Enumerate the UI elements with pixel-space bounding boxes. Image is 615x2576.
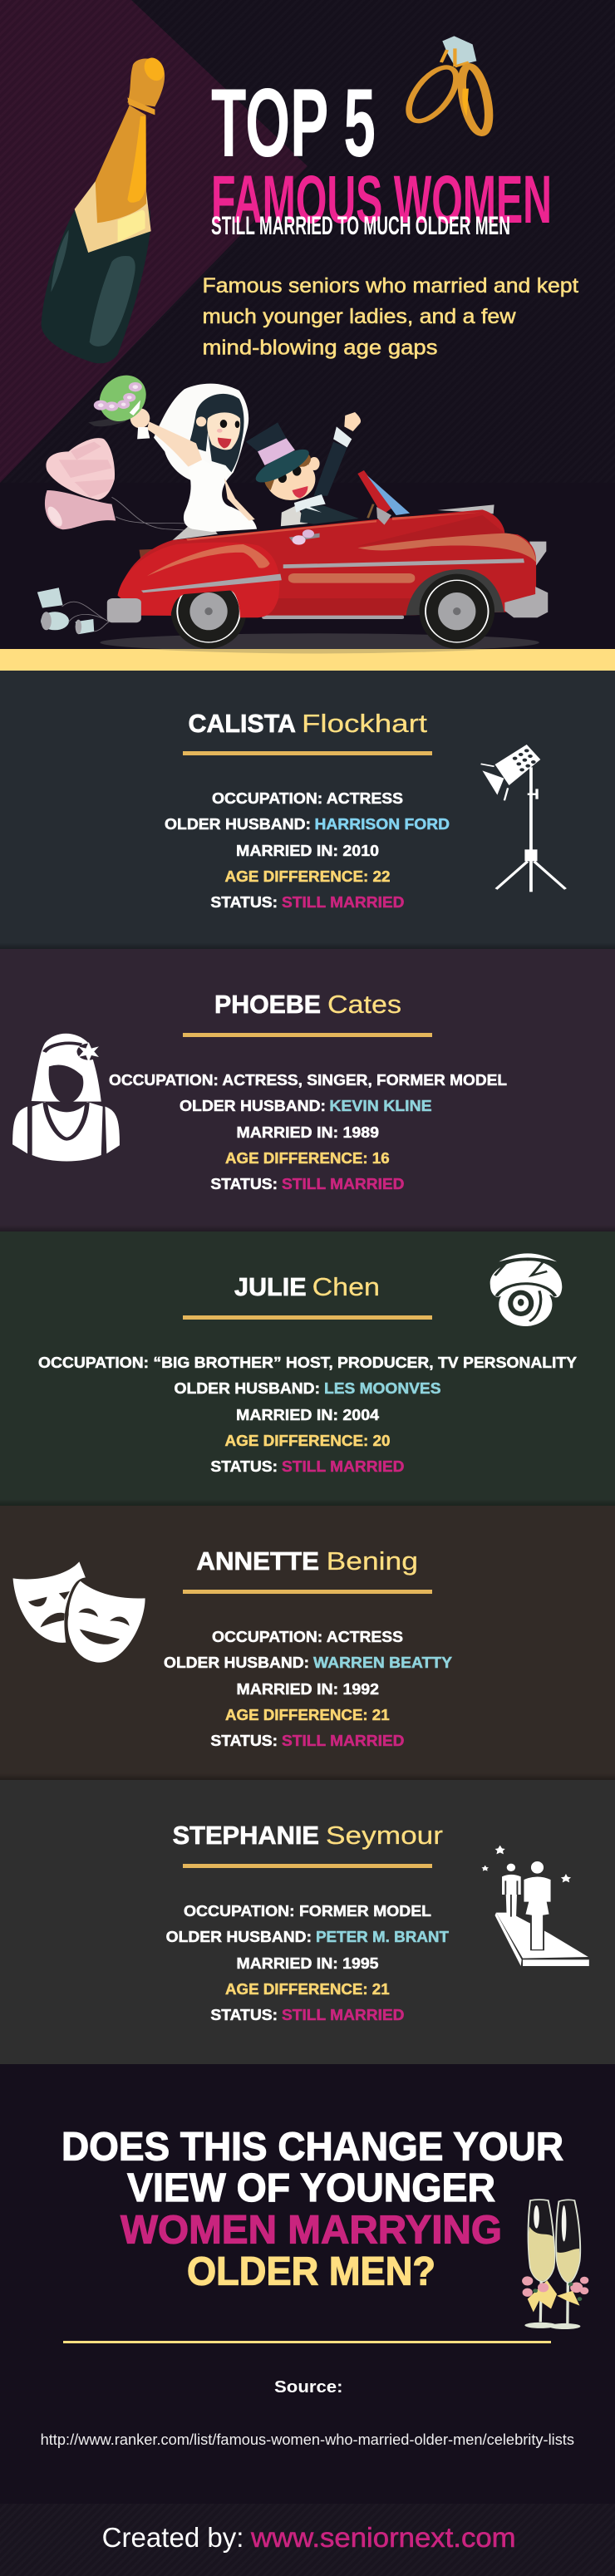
groom [246, 412, 361, 526]
icon: dome camera [490, 1253, 562, 1326]
details: OLDER HUSBAND: [175, 1379, 320, 1397]
details [166, 1902, 449, 2023]
heading: ANNETTE [196, 1546, 319, 1576]
credit line: Created by: [102, 2522, 244, 2553]
car shadow [100, 633, 539, 651]
panel: Calista Flockhart [0, 671, 615, 949]
details: HARRISON FORD [314, 815, 450, 833]
heading rule [183, 1590, 432, 1594]
magenta diagonal shape [0, 0, 308, 483]
details: LES MOONVES [324, 1379, 440, 1397]
wheel: rear [419, 574, 494, 649]
icon: champagne glasses [522, 2200, 588, 2329]
heading rule [183, 751, 432, 755]
panel: Phoebe Cates [0, 949, 615, 1231]
closing question [61, 2124, 563, 2293]
details: MARRIED IN: 1992 [236, 1680, 379, 1698]
icon: theatre masks [13, 1561, 145, 1663]
intro text: mind-blowing age gaps [203, 336, 437, 359]
details: PETER M. BRANT [316, 1928, 449, 1945]
details: OCCUPATION: ACTRESS [212, 789, 403, 807]
closing question: WOMEN MARRYING [121, 2207, 502, 2252]
heart balloons [45, 438, 189, 530]
icon: couple on catwalk [481, 1846, 589, 1966]
tin cans [37, 587, 109, 634]
details: OLDER HUSBAND: [166, 1928, 312, 1945]
details: KEVIN KLINE [329, 1097, 432, 1114]
credit line: www.seniornext.com [250, 2522, 516, 2553]
panel background [0, 1780, 615, 2064]
bride [130, 384, 257, 540]
panel: Julie Chen [0, 1231, 615, 1506]
wheel: front [171, 574, 246, 649]
icon: wedding rings [399, 36, 494, 135]
details: STATUS: [210, 893, 278, 911]
details: MARRIED IN: 2010 [236, 842, 379, 859]
details: OLDER HUSBAND: [165, 815, 311, 833]
heading [196, 1546, 418, 1576]
heading: CALISTA [188, 709, 296, 738]
title: TOP 5 [211, 68, 376, 177]
details: MARRIED IN: 1989 [236, 1123, 379, 1141]
panel background [0, 949, 615, 1231]
title [211, 68, 552, 240]
bouquet [88, 372, 152, 426]
details: OCCUPATION: “BIG BROTHER” HOST, PRODUCER, TV PERSONALITY [38, 1354, 577, 1371]
details: STATUS: [210, 2006, 278, 2023]
details: STILL MARRIED [282, 2006, 404, 2023]
details: STILL MARRIED [282, 1458, 404, 1475]
details: STILL MARRIED [282, 893, 404, 911]
details [165, 789, 450, 911]
heading rule [183, 1315, 432, 1320]
source label: Source: [274, 2378, 342, 2397]
heading [173, 1821, 443, 1850]
footer band [0, 2504, 615, 2576]
yellow band [0, 649, 615, 671]
heading: PHOEBE [214, 990, 321, 1019]
intro text: Famous seniors who married and kept [203, 274, 578, 297]
panel: Stephanie Seymour [0, 1780, 615, 2064]
heading [188, 709, 427, 738]
details: AGE DIFFERENCE: 21 [225, 1706, 390, 1723]
details: OLDER HUSBAND: [164, 1654, 309, 1671]
panel: Annette Bening [0, 1506, 615, 1780]
heading: Seymour [326, 1821, 443, 1850]
heading: Cates [327, 990, 401, 1019]
closing background [0, 2064, 615, 2504]
details: AGE DIFFERENCE: 20 [224, 1432, 391, 1449]
divider [63, 2341, 551, 2343]
front fender and trim [107, 507, 548, 622]
shadow on band [141, 649, 499, 653]
credit line [102, 2522, 516, 2553]
details: OLDER HUSBAND: [180, 1097, 326, 1114]
details: MARRIED IN: 1995 [236, 1954, 379, 1972]
details: MARRIED IN: 2004 [236, 1406, 380, 1423]
panel background [0, 671, 615, 949]
hero background [0, 0, 615, 649]
heading: STEPHANIE [173, 1821, 319, 1850]
panel background [0, 1506, 615, 1780]
details: STILL MARRIED [282, 1732, 404, 1749]
heading: JULIE [234, 1272, 307, 1301]
details: AGE DIFFERENCE: 22 [224, 868, 391, 885]
details: WARREN BEATTY [313, 1654, 452, 1671]
car [118, 470, 546, 619]
intro text: much younger ladies, and a few [203, 305, 517, 328]
source url: http://www.ranker.com/list/famous-women-who-married-older-men/celebrity-lists [41, 2431, 574, 2448]
details: AGE DIFFERENCE: 21 [225, 1980, 390, 1998]
closing panel [0, 2064, 615, 2504]
details: STATUS: [210, 1458, 278, 1475]
striped backdrop [0, 0, 615, 483]
details [38, 1354, 577, 1475]
details: STILL MARRIED [282, 1175, 404, 1192]
panel background [0, 1231, 615, 1506]
heading [234, 1272, 380, 1301]
icon: stage spotlight [481, 745, 565, 892]
heading: Chen [312, 1272, 380, 1301]
details: OCCUPATION: ACTRESS, SINGER, FORMER MODEL [109, 1071, 507, 1089]
heading: Flockhart [302, 709, 427, 738]
heading: Bening [327, 1546, 418, 1576]
details: OCCUPATION: ACTRESS [212, 1628, 403, 1645]
details: STATUS: [210, 1732, 278, 1749]
details: AGE DIFFERENCE: 16 [225, 1149, 390, 1167]
heading rule [183, 1033, 432, 1037]
closing question: OLDER MEN? [187, 2249, 435, 2293]
icon: champagne bottle [42, 57, 167, 363]
intro text [203, 274, 578, 359]
footer background [0, 2504, 615, 2576]
closing question: VIEW OF YOUNGER [127, 2166, 495, 2210]
details [109, 1071, 507, 1192]
heading rule [183, 1864, 432, 1868]
closing question: DOES THIS CHANGE YOUR [61, 2124, 563, 2169]
details [164, 1628, 452, 1749]
illustration: bride and groom in red convertible [37, 372, 548, 651]
details: OCCUPATION: FORMER MODEL [184, 1902, 431, 1920]
heading [214, 990, 401, 1019]
icon: bride silhouette [12, 1034, 120, 1161]
details: STATUS: [210, 1175, 278, 1192]
hero panel [0, 0, 615, 671]
